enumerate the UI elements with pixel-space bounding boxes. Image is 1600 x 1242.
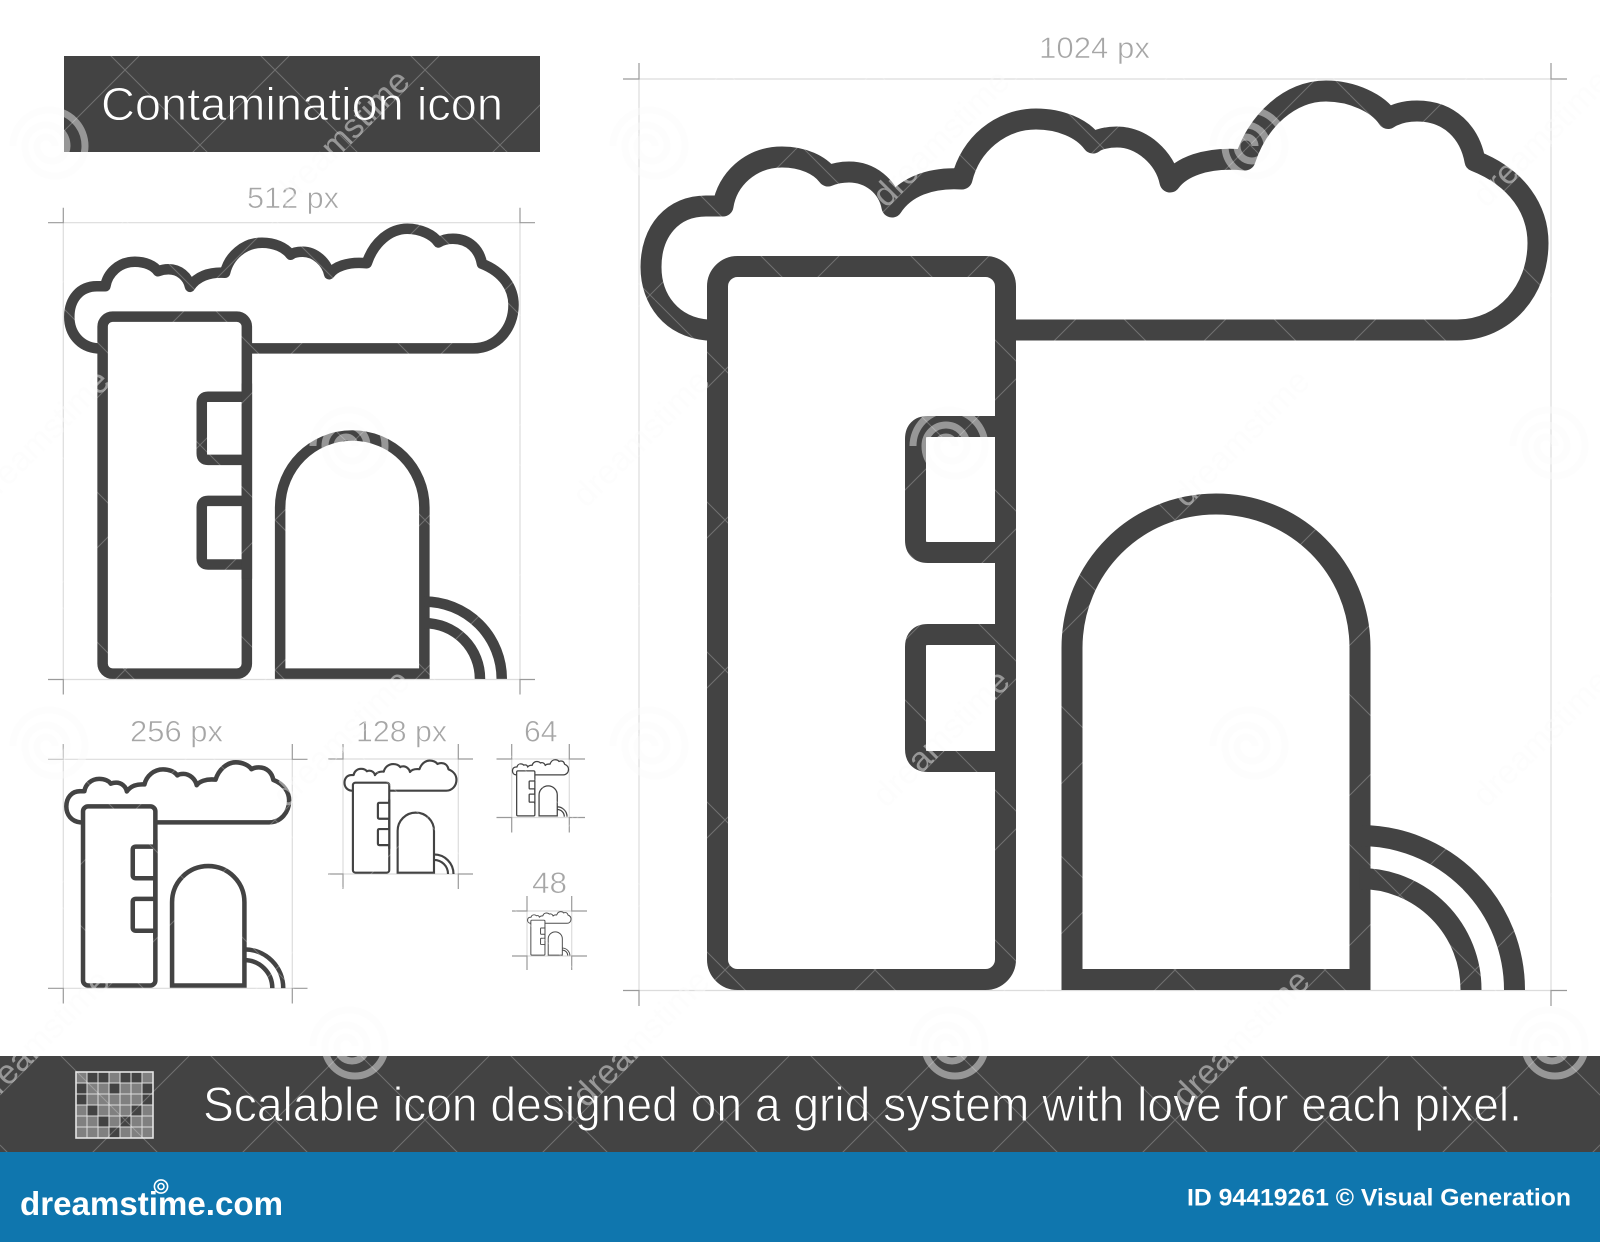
watermark wordmarks: dreamstime xyxy=(265,62,417,214)
frame: 1024 px guides xyxy=(623,63,1567,1006)
frame ticks: 128 px xyxy=(328,744,473,889)
image id and author credit: ID 94419261 © Visual Generation xyxy=(1187,1184,1571,1212)
watermark wordmarks: dreamstime xyxy=(565,362,717,514)
size label: 48: 48 xyxy=(532,867,567,900)
panel: 128 px icon preview xyxy=(328,716,473,889)
frame ticks: 256 px xyxy=(48,744,308,1004)
watermark wordmarks: dreamstime xyxy=(865,62,1017,214)
icon: pixel grid with heart xyxy=(76,1072,153,1138)
watermark wordmarks: dreamstime xyxy=(1165,962,1317,1114)
blue credit band xyxy=(0,1152,1600,1242)
frame: 256 px guides xyxy=(63,759,292,988)
panel: 256 px icon preview xyxy=(48,716,308,1004)
icon part: tower lower window xyxy=(916,634,1005,762)
frame ticks: 512 px xyxy=(48,208,535,694)
frame ticks: 48 px xyxy=(512,896,587,970)
icon: contamination plant, 256 px xyxy=(66,762,289,988)
icon: contamination plant, 64 px xyxy=(512,760,569,817)
icon part: tower right wall xyxy=(995,400,1016,790)
panel: 512 px icon preview xyxy=(48,182,535,694)
frame: 128 px guides xyxy=(343,759,458,874)
dark footer band xyxy=(0,1056,1600,1152)
icon part: pollution cloud xyxy=(651,91,1538,330)
footer tagline: Scalable icon designed on a grid system with love for each pixel. xyxy=(203,1079,1522,1132)
frame ticks: 64 px xyxy=(496,744,585,832)
watermark spirals xyxy=(13,110,1585,1076)
frame: 512 px guides xyxy=(63,223,520,679)
icon: contamination plant, 48 px xyxy=(528,912,571,956)
title bar xyxy=(64,56,540,152)
panel: 1024 px icon preview xyxy=(623,32,1567,1006)
watermark wordmarks: dreamstime xyxy=(1165,362,1317,514)
icon: contamination plant, large xyxy=(651,91,1538,990)
icon part: tower upper window xyxy=(916,426,1005,552)
icon: contamination plant, 512 px xyxy=(69,229,514,679)
watermark wordmarks: dreamstime xyxy=(565,962,717,1114)
logo wordmark: dreamstime.com xyxy=(20,1185,283,1222)
watermark wordmarks: dreamstime xyxy=(865,662,1017,814)
size label: 1024 px: 1024 px xyxy=(1039,32,1150,65)
watermark wordmarks: dreamstime xyxy=(265,662,417,814)
panel: 64 px icon preview xyxy=(496,716,585,832)
icon part: domed tank xyxy=(1072,504,1360,980)
icon: contamination plant, 128 px xyxy=(345,761,456,874)
frame: 48 px guides xyxy=(527,911,572,956)
title bar: Contamination icon xyxy=(101,78,503,130)
icon: logo spiral xyxy=(154,1180,168,1193)
size label: 256 px: 256 px xyxy=(130,716,223,748)
panel: 48 px icon preview xyxy=(512,867,587,970)
size label: 64: 64 xyxy=(524,716,558,748)
size label: 128 px: 128 px xyxy=(356,716,447,748)
size label: 512 px: 512 px xyxy=(247,182,339,215)
frame: 64 px guides xyxy=(512,759,569,818)
icon part: curved pipes xyxy=(1360,836,1514,990)
icon part: tower xyxy=(718,266,1006,980)
